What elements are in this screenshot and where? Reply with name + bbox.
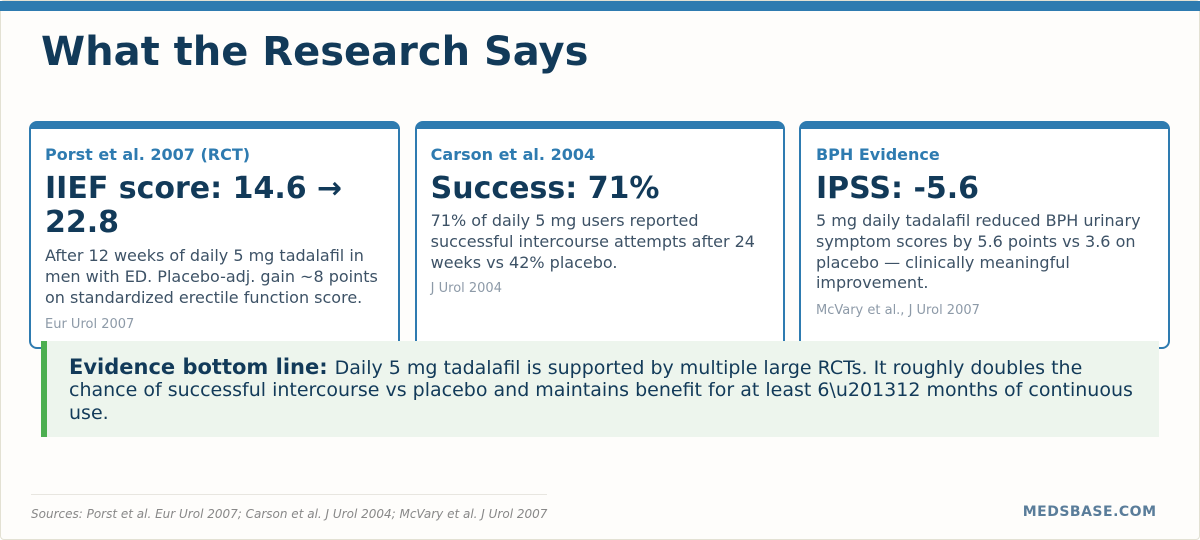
description: men with ED. Placebo-adj. gain ~8 points — [45, 267, 378, 286]
callout accent stripe — [41, 341, 47, 437]
panel: Porst et al. 2007 — [29, 121, 400, 349]
footer sources: Sources: Porst et al. Eur Urol 2007; Carson et al. J Urol 2004; McVary et al. J Urol 2007 — [31, 507, 547, 521]
callout text: Evidence bottom line: Daily 5 mg tadalafil is supported by multiple large RCTs. It roughly doubles the — [69, 355, 1082, 379]
description: on standardized erectile function score. — [45, 288, 362, 307]
study label: Carson et al. 2004 — [431, 145, 595, 164]
description: weeks vs 42% placebo. — [431, 253, 617, 272]
headline stat: IPSS: -5.6 — [816, 171, 979, 206]
description: 71% of daily 5 mg users reported — [431, 211, 698, 230]
footer divider — [31, 494, 547, 495]
headline stat: Success: 71% — [431, 171, 660, 206]
top accent bar — [0, 1, 1200, 11]
description: After 12 weeks of daily 5 mg tadalafil in — [45, 246, 364, 265]
title: What the Research Says — [41, 29, 588, 75]
description: improvement. — [816, 273, 928, 292]
description — [816, 211, 1141, 292]
description: successful intercourse attempts after 24 — [431, 232, 755, 251]
panel: BPH Evidence — [799, 121, 1170, 349]
callout text: chance of successful intercourse vs placebo and maintains benefit for at least 6\u201312 months of continuous — [69, 379, 1133, 401]
panel: Carson et al. 2004 — [415, 121, 785, 349]
citation: Eur Urol 2007 — [45, 317, 134, 332]
callout: evidence bottom line — [41, 341, 1159, 437]
study label: Porst et al. 2007 (RCT) — [45, 145, 250, 164]
brand mark: MEDSBASE.COM — [1023, 504, 1156, 520]
callout text: use. — [69, 402, 109, 424]
headline stat — [45, 171, 342, 240]
citation: McVary et al., J Urol 2007 — [816, 303, 980, 318]
description — [431, 211, 755, 272]
description — [45, 246, 378, 307]
study label: BPH Evidence — [816, 145, 940, 164]
description: 5 mg daily tadalafil reduced BPH urinary — [816, 211, 1141, 230]
headline stat: 22.8 — [45, 205, 119, 240]
description: placebo — clinically meaningful — [816, 253, 1070, 272]
description: symptom scores by 5.6 points vs 3.6 on — [816, 232, 1136, 251]
callout text — [69, 355, 1133, 424]
citation: J Urol 2004 — [431, 281, 502, 296]
headline stat: IIEF score: 14.6 → — [45, 171, 342, 206]
